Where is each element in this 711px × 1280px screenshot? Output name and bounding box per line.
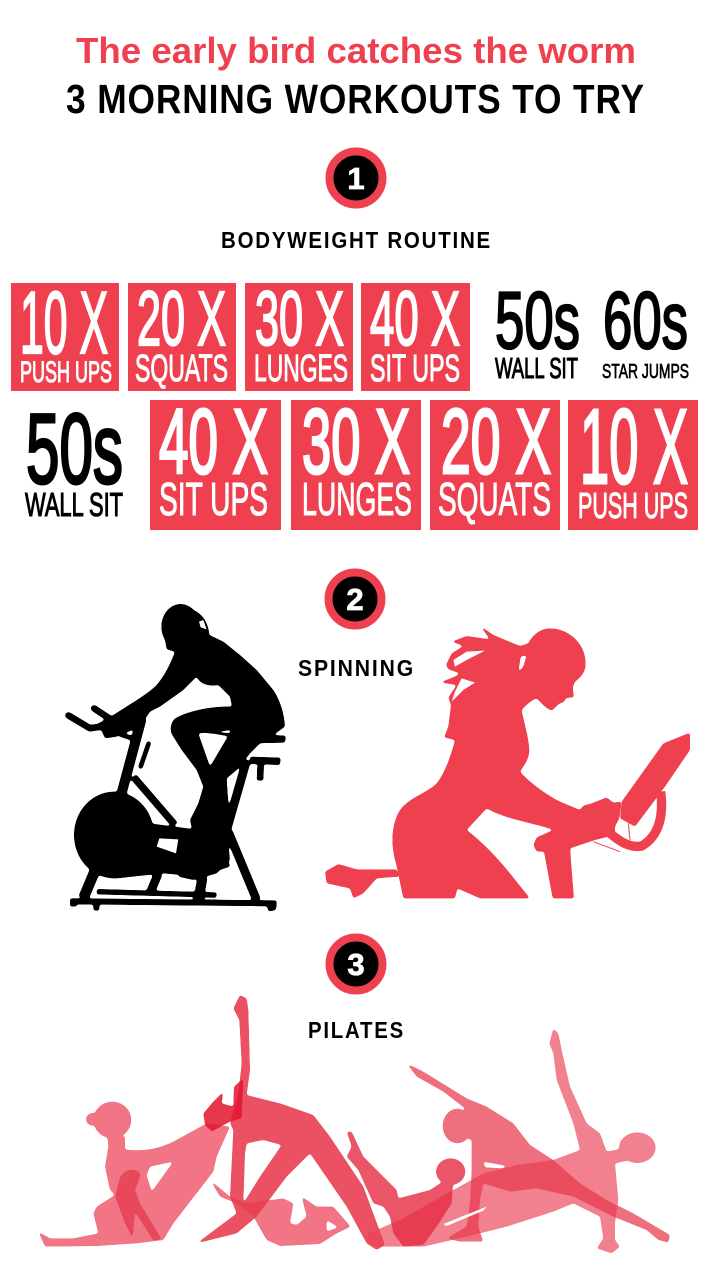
tile: 30 lunges: LUNGES [254, 348, 348, 390]
figure: seated leg raise [347, 1132, 465, 1247]
tile: 20 squats [430, 391, 560, 530]
tile: 10 push ups: 10 X [20, 273, 108, 372]
tile: 40 sit ups: 40 X [159, 391, 268, 493]
tile: 40 sit ups: 40 X [370, 276, 460, 362]
tile: 40 sit ups: SIT UPS [370, 348, 460, 390]
timed: 50s wall sit: 50s [26, 393, 123, 504]
section 1 number badge: 1 [347, 161, 365, 196]
icon: black cyclist silhouette on exercise bike [68, 604, 286, 912]
timed: 50s wall sit [495, 276, 580, 385]
tile: 20 squats: 20 X [137, 276, 226, 362]
tile: 20 squats [128, 276, 236, 391]
figure: triangle pose head [203, 1078, 243, 1132]
tile: 30 lunges [245, 276, 353, 391]
rider and bike silhouette [68, 604, 286, 912]
tile: 40 sit ups: SIT UPS [159, 473, 268, 525]
console screen [620, 733, 690, 827]
figures left group [38, 995, 385, 1250]
figure: side plank [365, 1028, 656, 1253]
panel: first exercise row [11, 273, 689, 391]
figure: small seated overlay [115, 1170, 162, 1241]
tile: 20 squats: 20 X [441, 391, 551, 493]
tile: 40 sit ups [361, 276, 470, 391]
rider body and bike post [392, 625, 622, 898]
section 3 heading: PILATES [308, 1017, 405, 1043]
timed: 50s wall sit [25, 393, 123, 523]
saddle [325, 864, 400, 898]
tile: 30 lunges [291, 391, 421, 530]
section 2 heading: SPINNING [298, 655, 415, 681]
frame and ponytail gaps [157, 620, 207, 853]
section 2 number badge: 2 [346, 582, 364, 617]
timed: 50s wall sit: 50s [495, 276, 580, 366]
highlight slit [443, 1207, 487, 1226]
figure: side angle [407, 1063, 670, 1243]
section 1 heading: BODYWEIGHT ROUTINE [221, 227, 492, 253]
illustration: pilates figures [38, 995, 670, 1253]
figure: seated v-sit with bun [38, 1102, 230, 1247]
figures right group [347, 1028, 670, 1253]
tile: 10 push ups [11, 273, 119, 391]
section 3 number badge [330, 938, 382, 990]
tile: 20 squats: SQUATS [438, 473, 551, 525]
tile: 30 lunges: 30 X [302, 391, 410, 493]
tile: 30 lunges: LUNGES [302, 473, 412, 525]
tile: 40 sit ups [150, 391, 281, 530]
timed: 50s wall sit: WALL SIT [25, 486, 123, 523]
panel: second exercise row [25, 388, 698, 530]
section 2 number badge [328, 572, 382, 626]
timed: 60s star jumps [602, 276, 689, 383]
section 3 number badge: 3 [347, 947, 365, 982]
tile: 30 lunges: 30 X [255, 276, 344, 362]
figure: triangle pose [197, 995, 385, 1250]
tile: 10 push ups: PUSH UPS [20, 356, 112, 389]
hair gaps [452, 651, 485, 702]
section 1 number badge [330, 152, 382, 204]
handlebar loop [610, 792, 662, 846]
tile: 10 push ups [568, 388, 698, 530]
title block [66, 30, 645, 122]
icon: red spinner silhouette [325, 625, 690, 898]
figure: lying crunch [210, 1180, 351, 1246]
timed: 50s wall sit: WALL SIT [495, 353, 578, 385]
tile: 20 squats: SQUATS [135, 348, 228, 390]
headline: The early bird catches the worm [76, 30, 636, 71]
